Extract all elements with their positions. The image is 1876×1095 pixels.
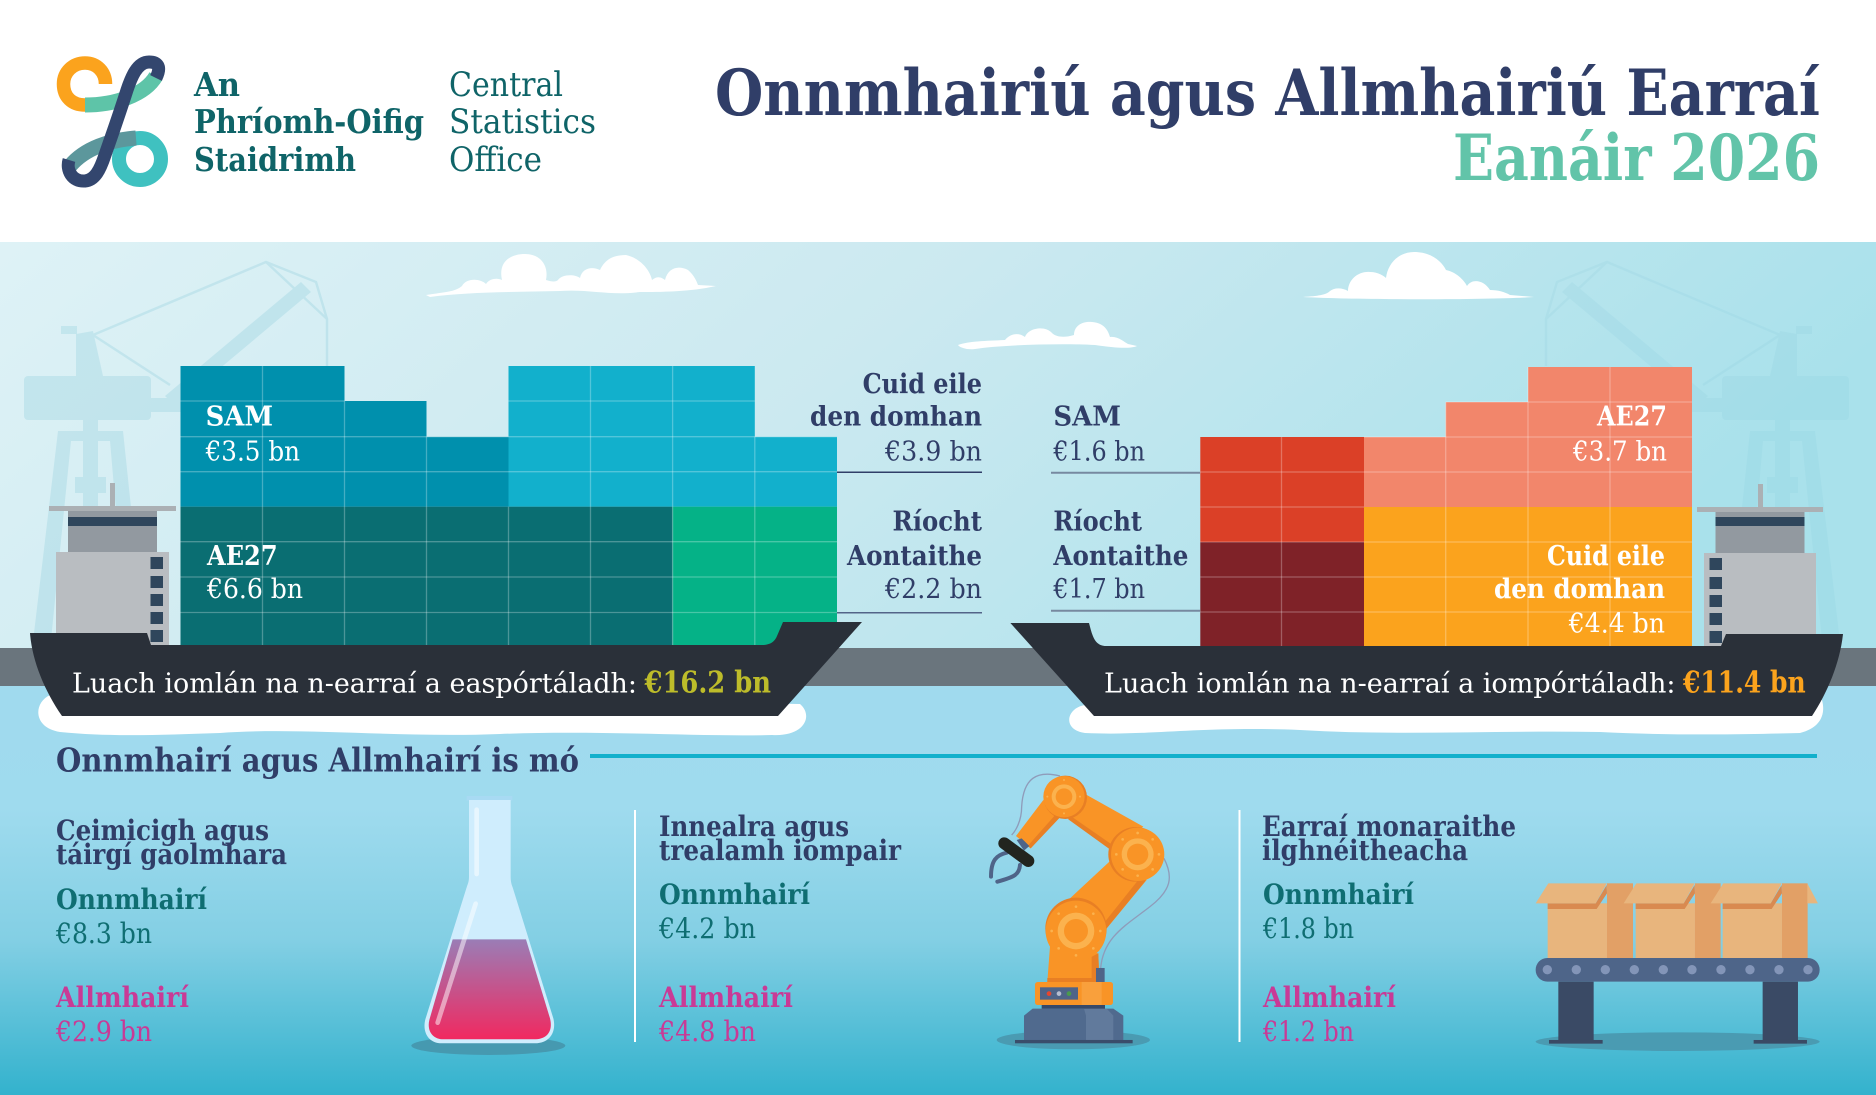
panel: machinery [658,774,1169,1049]
label: UK imports: €1.7 bn [1053,574,1145,605]
total label: imports: Luach iomlán na n-earraí a iompórtáladh: [1104,668,1676,700]
label: SAM imports: €1.6 bn [1053,437,1145,468]
label: UK exports: €2.2 bn [884,574,982,605]
hull [30,622,862,716]
logo text: English: Office [449,140,542,180]
exports: manufactured goods: €1.8 bn [1262,912,1354,945]
exports: machinery: Onnmhairí [659,878,810,911]
imports: manufactured goods [1262,981,1396,1048]
icon: flask [411,796,565,1055]
containers: rest of world [508,366,837,507]
label: EU27 imports: AE27 [1596,402,1667,433]
containers: UK imports [1200,542,1364,647]
panel: manufactured goods [1262,810,1820,1051]
exports: machinery [658,878,810,945]
title [715,56,1820,196]
exports: chemicals [55,883,207,950]
section heading [56,741,1817,780]
label: rest of world imports: €4.4 bn [1568,609,1665,640]
label: SAM exports: €3.5 bn [205,437,300,468]
containers: SAM imports [1200,437,1364,542]
logo text: Irish: Staidrimh [194,140,356,179]
label: UK exports: Aontaithe [846,541,982,572]
logo text: English [449,65,596,180]
containers: UK [673,507,837,647]
label: SAM exports: SAM [206,402,273,433]
label: EU27 exports: AE27 [206,541,278,572]
label: UK imports: Ríocht [1053,507,1142,538]
label: UK exports [837,507,982,613]
crane: right background [1546,262,1849,650]
icon: robot arm [991,774,1169,1049]
label: rest of world imports: Cuid eile [1547,541,1665,572]
export ship [30,366,982,716]
logo mark [64,62,161,181]
exports: chemicals: Onnmhairí [56,883,207,916]
foam: left ship [38,695,806,735]
panel: chemicals [55,796,565,1055]
divider [634,810,636,1042]
crane: left background [24,262,327,650]
heading: chemicals [56,814,287,871]
divider [1238,810,1240,1042]
imports: machinery: €4.8 bn [658,1015,756,1048]
containers: SAM [180,366,508,507]
label: rest of world imports [1494,541,1665,640]
ship tower [49,483,176,648]
water background [0,686,1876,1095]
cloud: upper right [1303,252,1534,299]
heading: manufactured goods: Earraí monaraithe [1262,810,1516,843]
exports: machinery: €4.2 bn [658,912,756,945]
cloud: upper left [426,254,716,297]
exports: manufactured goods: Onnmhairí [1263,878,1414,911]
logo: Central Statistics Office [64,62,596,181]
label: rest of world exports: den domhan [810,402,982,433]
heading: chemicals: táirgí gaolmhara [56,838,287,871]
exports: chemicals: €8.3 bn [55,917,152,950]
hull [1010,623,1843,716]
total label: exports: Luach iomlán na n-earraí a easpórtáladh: [72,668,637,700]
label: UK imports: Aontaithe [1052,541,1188,572]
label: rest of world exports [810,369,982,472]
logo text: Irish: An [193,65,240,104]
label: UK exports: Ríocht [892,507,982,538]
imports: manufactured goods: Allmhairí [1262,981,1396,1014]
label: SAM imports [1051,402,1200,473]
cloud: centre [958,322,1137,349]
quay band [0,648,1876,686]
sky background [0,242,1876,650]
logo text: Irish: Phríomh-Oifig [194,102,424,141]
label: EU27 imports [1572,402,1667,468]
imports: machinery [658,981,793,1048]
logo text: English: Central [449,65,563,105]
heading: manufactured goods [1262,810,1516,867]
total label: exports: €16.2 bn [644,666,771,701]
containers: EU27 imports [1364,367,1692,507]
heading: machinery: trealamh iompair [659,834,902,867]
logo text: English: Statistics [449,102,596,142]
foam: right ship [1069,700,1823,734]
label: SAM exports [205,402,300,468]
label: SAM imports: SAM [1053,402,1121,433]
label: rest of world exports: Cuid eile [863,369,982,400]
label: EU27 imports: €3.7 bn [1572,437,1667,468]
section heading: Onnmhairí agus Allmhairí is mó [56,741,579,780]
label: EU27 exports: €6.6 bn [206,574,303,605]
containers: EU27 [180,507,673,647]
heading: manufactured goods: ilghnéitheacha [1262,834,1468,867]
icon: conveyor with boxes [1536,883,1820,1051]
imports: chemicals [55,981,189,1048]
containers: rest of world imports [1364,507,1692,647]
heading: machinery [659,810,902,867]
imports: chemicals: €2.9 bn [55,1015,152,1048]
label: UK imports [1051,507,1200,611]
import ship [1010,367,1843,716]
ship tower [1697,484,1823,648]
label: rest of world imports: den domhan [1494,574,1665,605]
logo text: Irish [193,65,424,179]
exports: manufactured goods [1262,878,1414,945]
imports: machinery: Allmhairí [658,981,793,1014]
label: rest of world exports: €3.9 bn [884,437,982,468]
label: EU27 exports [206,541,303,605]
imports: chemicals: Allmhairí [55,981,189,1014]
heading: machinery: Innealra agus [659,810,849,843]
imports: manufactured goods: €1.2 bn [1262,1015,1354,1048]
heading: chemicals: Ceimicigh agus [56,814,269,847]
total label: imports: €11.4 bn [1682,666,1806,701]
